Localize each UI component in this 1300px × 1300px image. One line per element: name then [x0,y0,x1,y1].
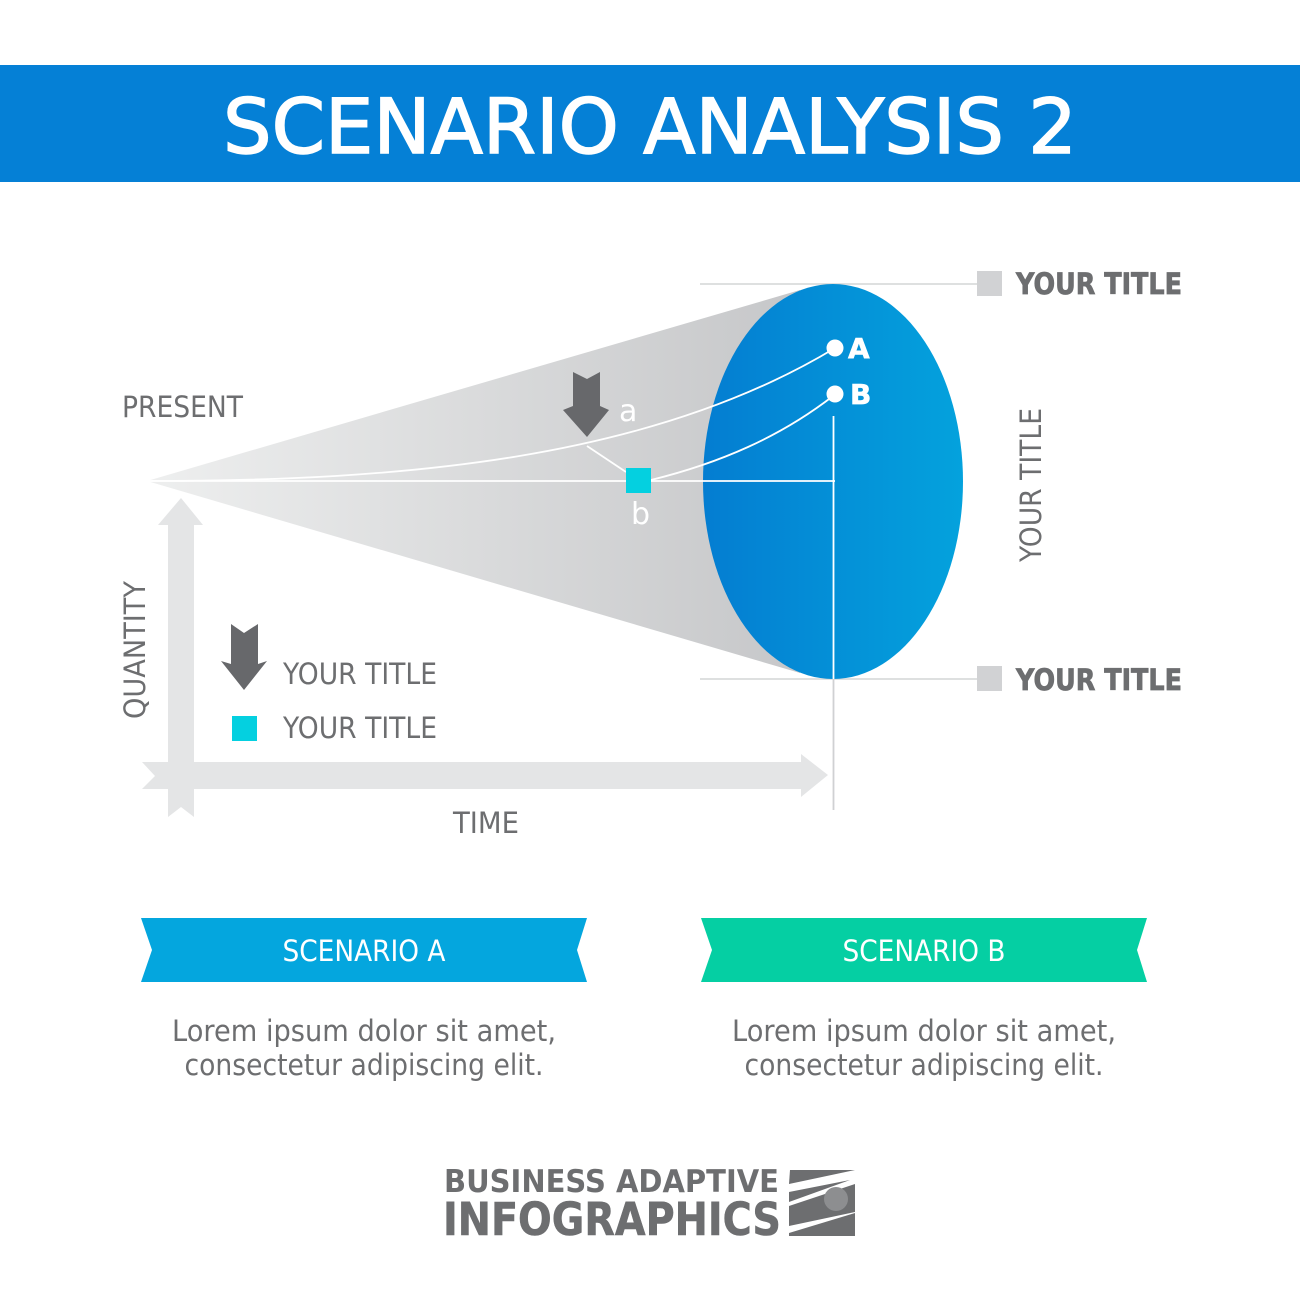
logo icon [789,1170,855,1236]
axes [142,498,828,817]
legend: arrow: YOUR TITLE [282,657,437,691]
point B: B [850,378,871,411]
square marker b: b [631,497,650,532]
title: SCENARIO ANALYSIS 2 [223,82,1077,171]
point B [826,378,871,411]
scenario A ribbon [141,918,587,982]
title banner [0,65,1300,182]
down arrow marker a: a [619,394,637,429]
footer logo [443,1164,855,1246]
cone body [147,290,800,673]
quantity label: QUANTITY [118,581,152,719]
scenario B text: Lorem ipsum dolor sit amet, [732,1014,1116,1048]
scenario A ribbon: SCENARIO A [282,934,446,968]
blue ellipse [703,284,963,679]
scenario B text: consectetur adipiscing elit. [744,1048,1104,1082]
point A: A [848,332,870,365]
top and bottom leader lines [700,284,978,679]
vertical right label: YOUR TITLE [1014,408,1048,563]
scenario B ribbon: SCENARIO B [842,934,1006,968]
scenario B text [732,1014,1116,1082]
connecting lines [147,348,835,481]
present label: PRESENT [122,390,243,424]
time label: TIME [452,806,519,840]
scenario B ribbon [701,918,1147,982]
scenario A text: Lorem ipsum dolor sit amet, [172,1014,556,1048]
square marker b [626,468,651,532]
top right label: YOUR TITLE [1015,267,1182,301]
footer logo: INFOGRAPHICS [443,1193,781,1246]
scenario A text [172,1014,556,1082]
bottom right label: YOUR TITLE [1015,663,1182,697]
footer logo: BUSINESS ADAPTIVE [444,1164,779,1200]
legend: arrow [221,624,437,691]
vertical guide line [832,416,834,810]
point A [826,332,870,365]
legend: square: YOUR TITLE [282,711,437,745]
cone chart [147,284,978,810]
down arrow marker a [563,372,637,437]
scenario A text: consectetur adipiscing elit. [184,1048,544,1082]
